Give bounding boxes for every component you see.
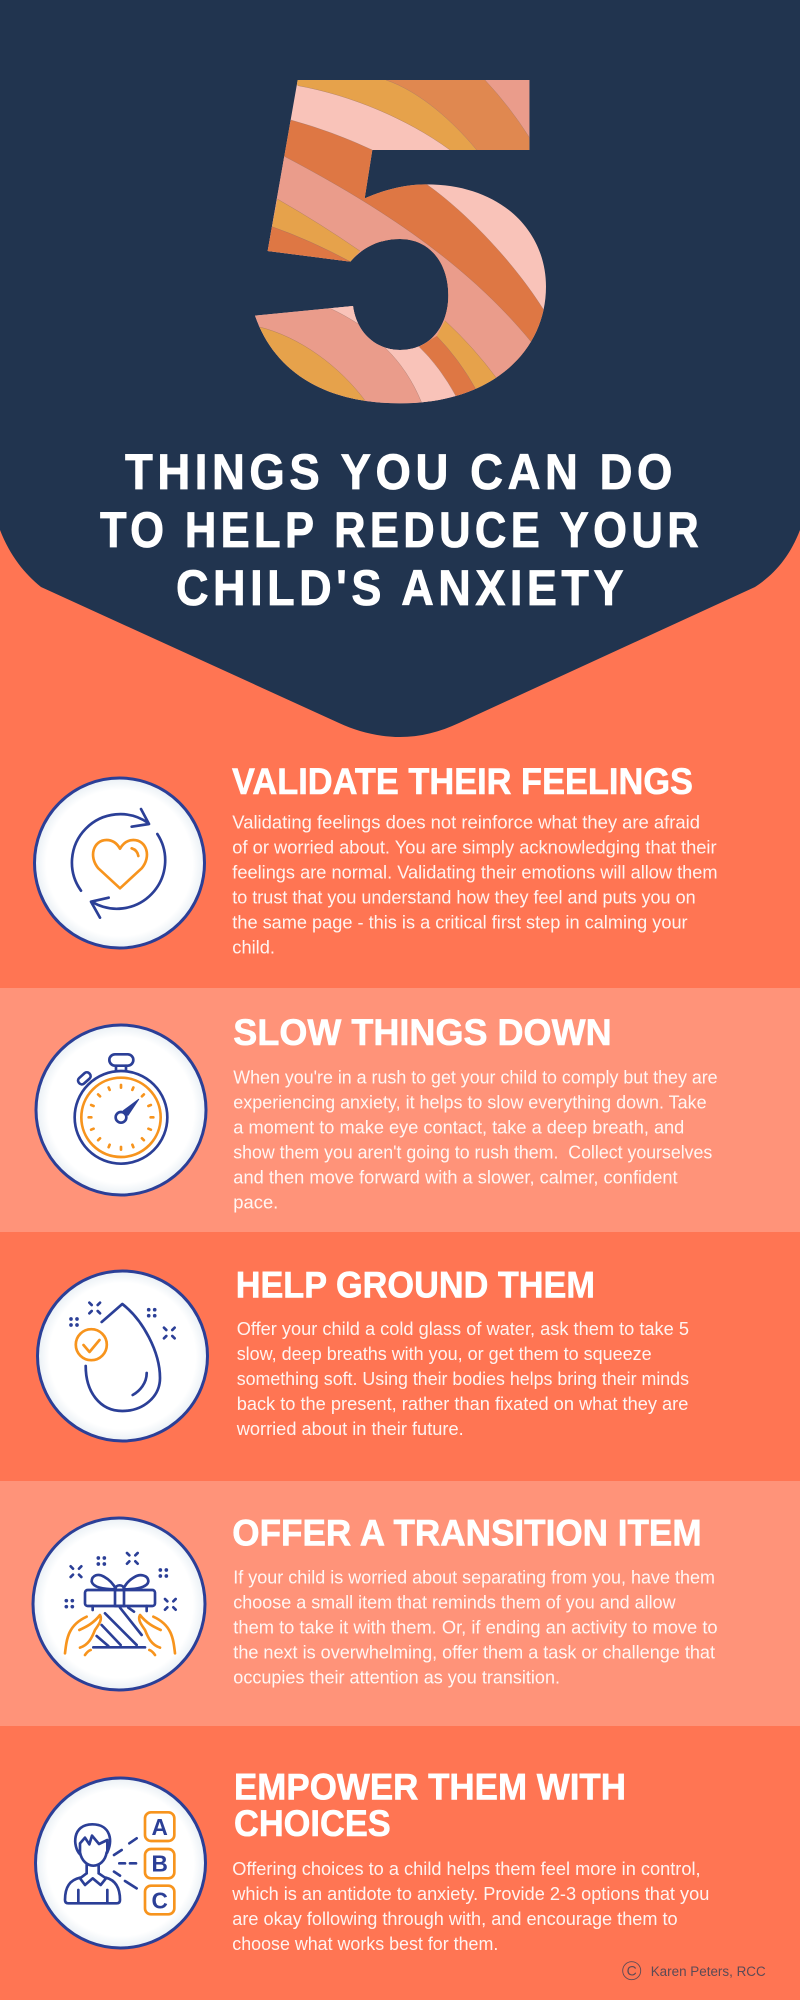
text block: help ground them: slow, deep breaths with you, or get them to squeeze	[237, 1343, 652, 1364]
text block: help ground them: something soft. Using their bodies helps bring their minds	[237, 1368, 689, 1389]
text block: offer a transition item: choose a small item that reminds them of you and allow	[233, 1591, 676, 1612]
credit: Karen Peters, RCC	[623, 1962, 766, 1980]
text block: offer a transition item	[233, 1566, 718, 1687]
icon: hands holding gift	[33, 1518, 205, 1690]
text block: help ground them: Offer your child a cold glass of water, ask them to take 5	[237, 1318, 689, 1339]
icon: person with A B C choices: B	[151, 1851, 168, 1877]
credit: Karen Peters, RCC: C	[627, 1962, 637, 1978]
icon: person with A B C choices: A	[151, 1814, 168, 1840]
text block: empower them with choices: choose what works best for them.	[232, 1933, 498, 1954]
icon: heart with circular arrows	[34, 778, 204, 948]
credit: Karen Peters, RCC: Karen Peters, RCC	[651, 1964, 766, 1979]
text block: slow things down	[233, 1066, 718, 1212]
text block: help ground them: worried about in their future.	[236, 1418, 464, 1439]
title	[100, 444, 703, 616]
icon: stopwatch	[36, 1025, 206, 1195]
text block: empower them with choices: are okay following through with, and encourage them to	[232, 1908, 678, 1929]
text block: slow things down: pace.	[233, 1191, 278, 1212]
heading: help ground them: HELP GROUND THEM	[236, 1264, 595, 1305]
text block: validate their feelings: to trust that you understand how they feel and puts you on	[232, 886, 696, 907]
title: THINGS YOU CAN DO	[125, 444, 677, 500]
heading: slow things down: SLOW THINGS DOWN	[233, 1012, 612, 1053]
header navy pennant	[0, 0, 800, 737]
text block: empower them with choices: Offering choices to a child helps them feel more in control,	[232, 1858, 701, 1879]
text block: slow things down: experiencing anxiety, it helps to slow everything down. Take	[233, 1091, 707, 1112]
text block: slow things down: show them you aren't going to rush them. Collect yourselves	[233, 1141, 712, 1162]
band: transition item background	[0, 1481, 800, 1726]
icon: person with A B C choices: C	[151, 1887, 168, 1913]
heading: offer a transition item: OFFER A TRANSITION ITEM	[232, 1513, 702, 1554]
text block: empower them with choices	[231, 1858, 709, 1954]
text block: help ground them: back to the present, rather than fixated on what they are	[237, 1393, 688, 1414]
text block: validate their feelings	[232, 811, 718, 957]
text block: offer a transition item: If your child is worried about separating from you, have them	[233, 1566, 715, 1587]
text block: slow things down: a moment to make eye contact, take a deep breath, and	[233, 1116, 684, 1137]
text block: validate their feelings: child.	[232, 936, 275, 957]
text block: offer a transition item: them to take it with them. Or, if ending an activity to move to	[233, 1616, 718, 1637]
text block: slow things down: and then move forward with a slower, calmer, confident	[233, 1166, 678, 1187]
text block: empower them with choices: which is an antidote to anxiety. Provide 2-3 options that you	[231, 1883, 709, 1904]
text block: help ground them	[236, 1318, 689, 1439]
text block: slow things down: When you're in a rush to get your child to comply but they are	[233, 1066, 718, 1087]
band: slow things down background	[0, 988, 800, 1232]
heading: validate their feelings: VALIDATE THEIR FEELINGS	[232, 761, 693, 802]
title: CHILD'S ANXIETY	[176, 560, 628, 616]
text block: validate their feelings: of or worried about. You are simply acknowledging that their	[232, 836, 717, 857]
text block: offer a transition item: occupies their attention as you transition.	[233, 1666, 560, 1687]
icon: person with A B C choices	[36, 1778, 206, 1948]
text block: validate their feelings: the same page - this is a critical first step in calming your	[232, 911, 688, 932]
text block: offer a transition item: the next is overwhelming, offer them a task or challenge that	[233, 1641, 715, 1662]
title: TO HELP REDUCE YOUR	[100, 502, 703, 558]
heading: empower them with choices: EMPOWER THEM WITH	[234, 1766, 626, 1807]
big number 5	[255, 80, 546, 404]
icon: water drop with check	[38, 1271, 208, 1441]
heading: empower them with choices	[234, 1766, 626, 1844]
text block: validate their feelings: Validating feelings does not reinforce what they are afraid	[232, 811, 700, 832]
text block: validate their feelings: feelings are normal. Validating their emotions will allow them	[232, 861, 718, 882]
heading: empower them with choices: CHOICES	[234, 1803, 391, 1844]
